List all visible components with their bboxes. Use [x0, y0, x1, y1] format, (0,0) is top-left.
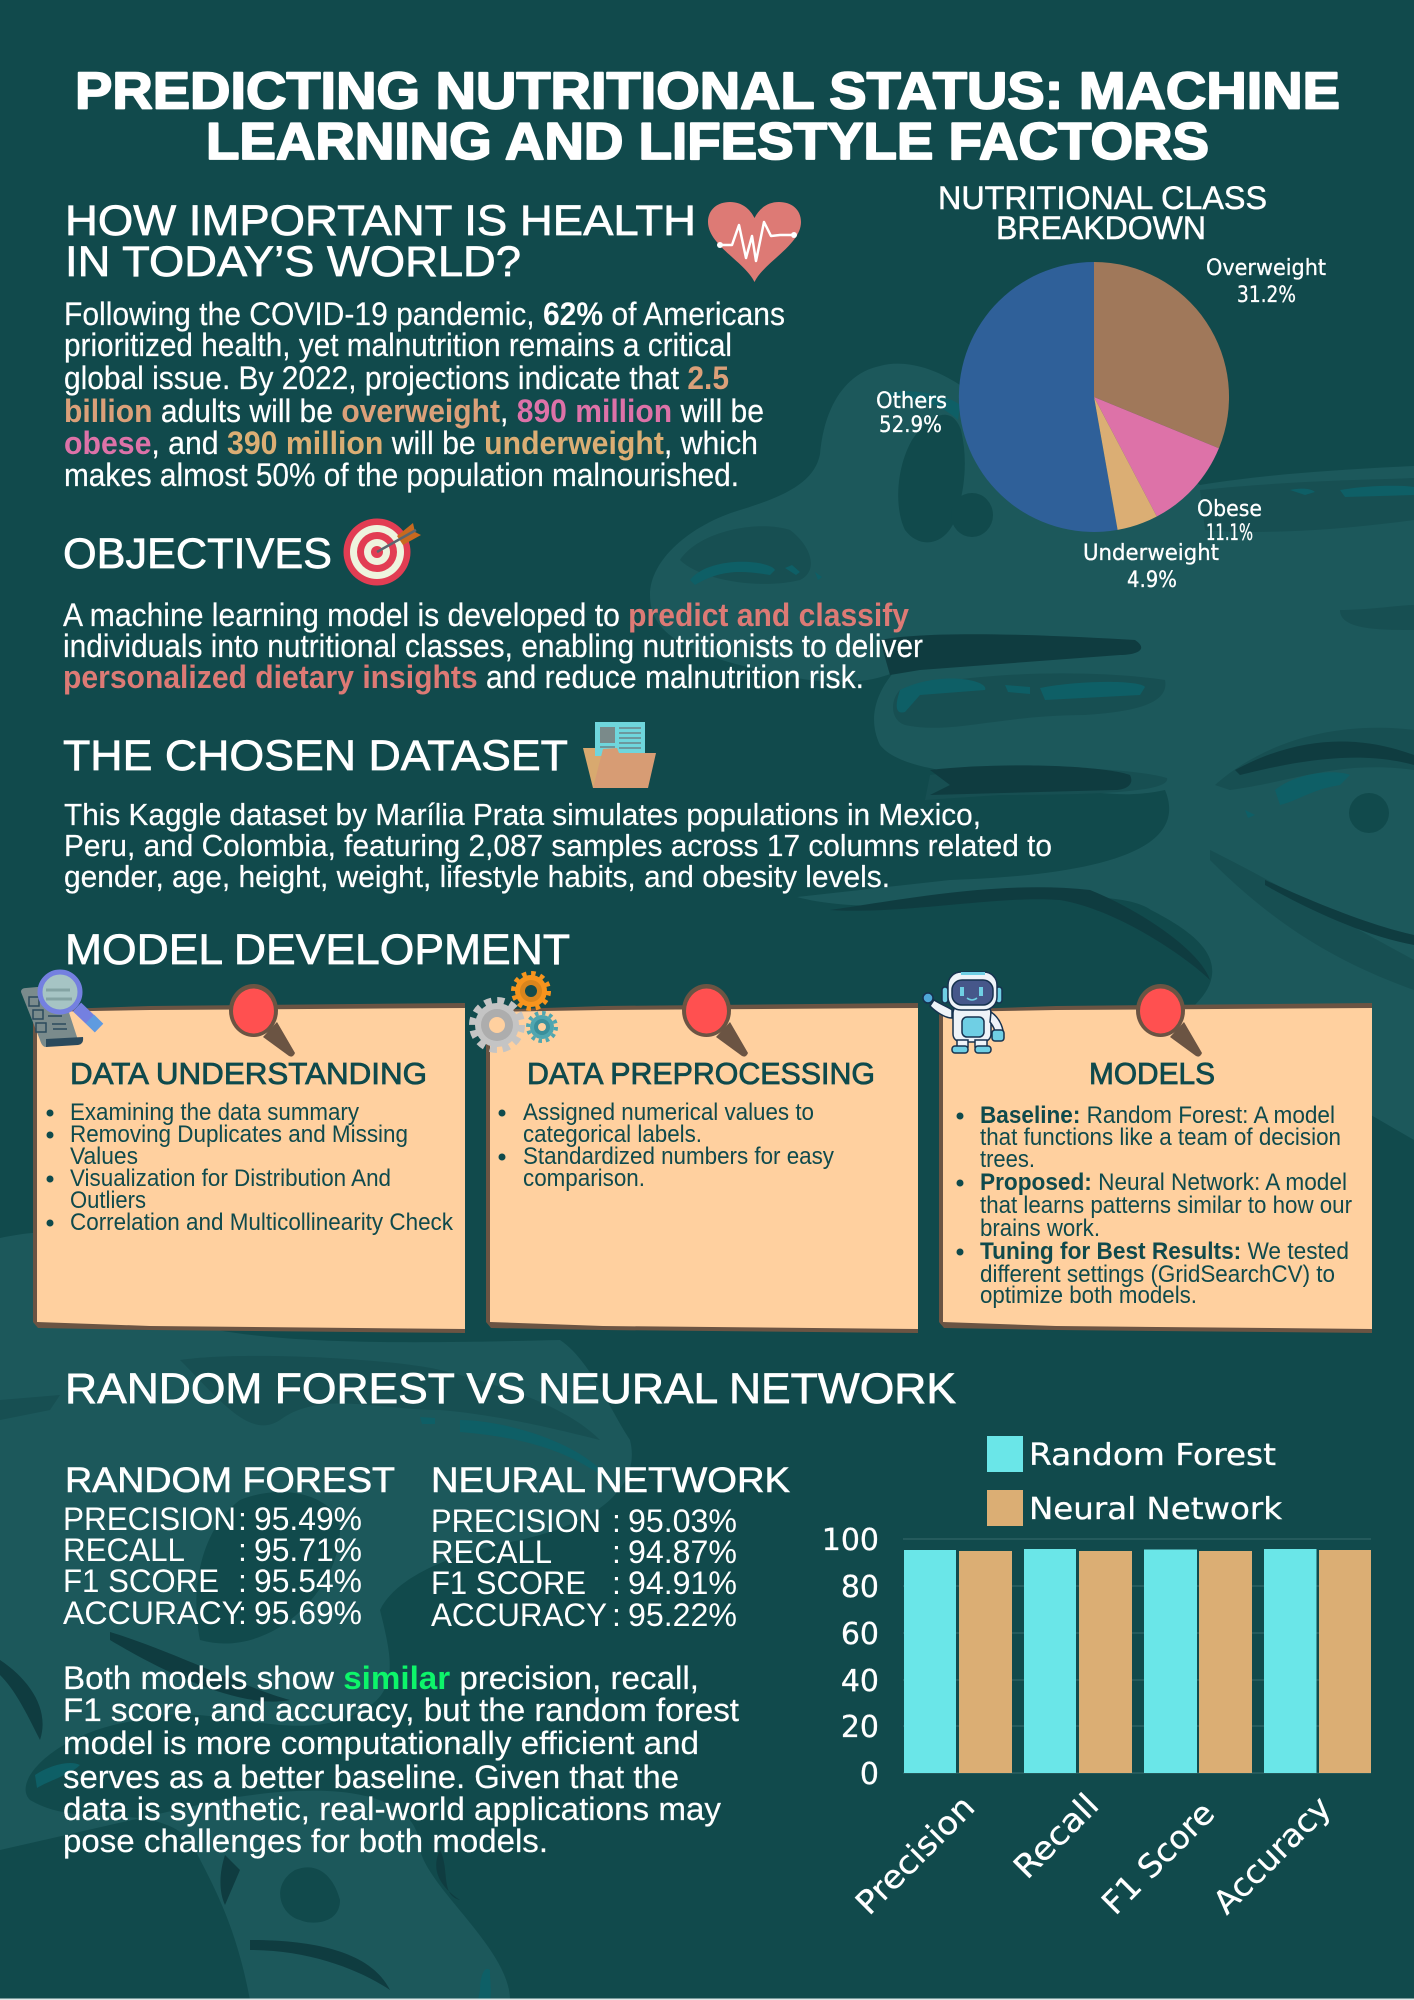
- text: comparison paragraph: serves as a better baseline. Given that the: [63, 1759, 679, 1795]
- metrics: neural network: PRECISION: [431, 1503, 601, 1539]
- icon: robot astronaut: [923, 972, 1004, 1053]
- metrics: neural network: :: [612, 1597, 621, 1633]
- metrics: neural network: :: [612, 1503, 621, 1539]
- panel: models: trees.: [980, 1146, 1035, 1173]
- metrics: random forest: :: [238, 1563, 247, 1599]
- metrics: neural network: :: [612, 1565, 621, 1601]
- bar chart: Precision: [848, 1788, 982, 1922]
- metrics: neural network: 95.03%: [628, 1503, 737, 1539]
- panel: data understanding: Visualization for Distribution And: [70, 1165, 391, 1192]
- panel: data preprocessing: Assigned numerical values to: [523, 1099, 814, 1126]
- panel: models: optimize both models.: [980, 1282, 1197, 1309]
- metrics: random forest: F1 SCORE: [63, 1563, 219, 1599]
- text: objectives paragraph: individuals into nutritional classes, enabling nutritionists to deliver: [63, 628, 923, 664]
- heading: model development: MODEL DEVELOPMENT: [65, 926, 570, 974]
- pie chart: Underweight: [1083, 541, 1219, 566]
- panel: models: Baseline: Random Forest: A model: [980, 1102, 1335, 1129]
- icon: target with arrow: [344, 518, 421, 586]
- heading: nutritional class breakdown: NUTRITIONAL CLASS: [938, 180, 1267, 216]
- icon: magnifier over checklist: [21, 972, 99, 1047]
- bar chart: 80: [841, 1570, 879, 1605]
- panel: data understanding: Removing Duplicates and Missing: [70, 1121, 408, 1148]
- metrics: neural network: RECALL: [431, 1534, 552, 1570]
- metrics: neural network: ACCURACY: [431, 1597, 607, 1633]
- title: [75, 62, 1340, 171]
- metrics: random forest: 95.54%: [254, 1563, 362, 1599]
- bar chart: 20: [841, 1710, 879, 1745]
- text: dataset paragraph: gender, age, height, weight, lifestyle habits, and obesity levels.: [64, 859, 890, 894]
- pie chart: Obese: [1197, 497, 1262, 522]
- legend: [987, 1436, 1283, 1527]
- bar chart: F1 Score: [1094, 1794, 1222, 1922]
- panel: models: MODELS: [1089, 1056, 1215, 1091]
- metrics: random forest: 95.49%: [254, 1501, 362, 1537]
- metrics: neural network: 95.22%: [628, 1597, 737, 1633]
- text: health paragraph: makes almost 50% of the population malnourished.: [64, 457, 739, 493]
- icon: folder with document: [583, 722, 656, 788]
- text: comparison paragraph: pose challenges for both models.: [63, 1823, 548, 1859]
- bar chart: 100: [822, 1523, 879, 1558]
- pie chart: 52.9%: [879, 413, 942, 438]
- heading: how important is health: IN TODAY’S WORLD?: [65, 238, 521, 286]
- bar chart: 40: [841, 1664, 879, 1699]
- text: dataset paragraph: [64, 797, 1052, 894]
- pie chart: Overweight: [1206, 256, 1326, 281]
- pie chart: 11.1%: [1206, 521, 1253, 546]
- icon: heart with pulse: [708, 202, 801, 282]
- metrics: neural network: NEURAL NETWORK: [431, 1461, 790, 1500]
- panel: data understanding: Values: [70, 1143, 138, 1170]
- metrics: random forest: 95.71%: [254, 1532, 362, 1568]
- panel: models: that learns patterns similar to how our: [980, 1192, 1352, 1219]
- text: objectives paragraph: [63, 597, 923, 695]
- metrics: neural network: [431, 1461, 790, 1633]
- metrics: random forest: [63, 1461, 395, 1631]
- heading: how important is health: [65, 197, 696, 286]
- pie chart: 31.2%: [1237, 283, 1296, 308]
- text: objectives paragraph: personalized dietary insights and reduce malnutrition risk.: [63, 659, 864, 695]
- metrics: random forest: :: [238, 1501, 247, 1537]
- text: health paragraph: prioritized health, yet malnutrition remains a critical: [64, 327, 732, 363]
- metrics: random forest: RECALL: [63, 1532, 185, 1568]
- text: health paragraph: global issue. By 2022, projections indicate that 2.5: [64, 360, 729, 396]
- panel: data understanding: [33, 984, 465, 1333]
- title: PREDICTING NUTRITIONAL STATUS: MACHINE: [75, 62, 1340, 120]
- metrics: random forest: RANDOM FOREST: [65, 1461, 395, 1500]
- panel: data preprocessing: comparison.: [523, 1165, 645, 1192]
- panel: data preprocessing: [486, 984, 918, 1333]
- text: health paragraph: obese, and 390 million will be underweight, which: [64, 425, 758, 461]
- text: comparison paragraph: F1 score, and accuracy, but the random forest: [63, 1692, 739, 1728]
- bar chart: 60: [841, 1617, 879, 1652]
- legend: Neural Network: [1029, 1492, 1283, 1527]
- heading: objectives: OBJECTIVES: [63, 530, 332, 578]
- text: comparison paragraph: model is more computationally efficient and: [63, 1725, 699, 1761]
- panel: data preprocessing: categorical labels.: [523, 1121, 702, 1148]
- metrics: random forest: PRECISION: [63, 1501, 236, 1537]
- metrics: random forest: 95.69%: [254, 1595, 362, 1631]
- text: dataset paragraph: This Kaggle dataset by Marília Prata simulates populations in Mexico,: [64, 797, 981, 832]
- text: health paragraph: [64, 296, 785, 493]
- title: LEARNING AND LIFESTYLE FACTORS: [206, 113, 1209, 171]
- heading: random forest vs neural network: RANDOM FOREST VS NEURAL NETWORK: [65, 1365, 956, 1413]
- pie chart: [876, 256, 1326, 593]
- panel: data understanding: DATA UNDERSTANDING: [70, 1056, 427, 1091]
- pie chart: Others: [876, 389, 947, 414]
- icon: gears: [473, 974, 556, 1049]
- legend: Random Forest: [1029, 1438, 1276, 1473]
- heading: nutritional class breakdown: [938, 180, 1267, 246]
- heading: nutritional class breakdown: BREAKDOWN: [996, 210, 1206, 246]
- metrics: random forest: :: [238, 1595, 247, 1631]
- metrics: random forest: ACCURACY: [63, 1595, 243, 1631]
- panel: data preprocessing: Standardized numbers for easy: [523, 1143, 834, 1170]
- text: health paragraph: billion adults will be overweight, 890 million will be: [64, 393, 764, 429]
- text: comparison paragraph: [63, 1660, 739, 1859]
- metrics: neural network: :: [612, 1534, 621, 1570]
- panel: models: [939, 984, 1372, 1333]
- panel: models: that functions like a team of decision: [980, 1124, 1341, 1151]
- heading: the chosen dataset: THE CHOSEN DATASET: [63, 732, 568, 780]
- bar chart: [822, 1523, 1371, 1922]
- metrics: neural network: 94.87%: [628, 1534, 737, 1570]
- text: health paragraph: Following the COVID-19 pandemic, 62% of Americans: [64, 296, 785, 332]
- text: comparison paragraph: data is synthetic, real-world applications may: [63, 1791, 721, 1827]
- bar chart: Recall: [1006, 1786, 1106, 1886]
- bar chart: Accuracy: [1206, 1789, 1338, 1921]
- text: objectives paragraph: A machine learning model is developed to predict and classify: [63, 597, 909, 633]
- panel: data understanding: Correlation and Multicollinearity Check: [70, 1209, 454, 1236]
- heading: how important is health: HOW IMPORTANT IS HEALTH: [65, 197, 696, 245]
- text: comparison paragraph: Both models show similar precision, recall,: [63, 1660, 699, 1696]
- panel: models: Tuning for Best Results: We tested: [980, 1238, 1349, 1265]
- bar chart: 0: [860, 1757, 879, 1792]
- panel: data understanding: Examining the data summary: [70, 1099, 359, 1126]
- panel: models: Proposed: Neural Network: A model: [980, 1169, 1347, 1196]
- pie chart: 4.9%: [1127, 568, 1177, 593]
- panel: models: different settings (GridSearchCV) to: [980, 1261, 1335, 1288]
- panel: data understanding: Outliers: [70, 1187, 146, 1214]
- metrics: random forest: :: [238, 1532, 247, 1568]
- panel: data preprocessing: DATA PREPROCESSING: [527, 1056, 875, 1091]
- metrics: neural network: F1 SCORE: [431, 1565, 586, 1601]
- metrics: neural network: 94.91%: [628, 1565, 737, 1601]
- text: dataset paragraph: Peru, and Colombia, featuring 2,087 samples across 17 columns related to: [64, 828, 1052, 863]
- panel: models: brains work.: [980, 1215, 1100, 1242]
